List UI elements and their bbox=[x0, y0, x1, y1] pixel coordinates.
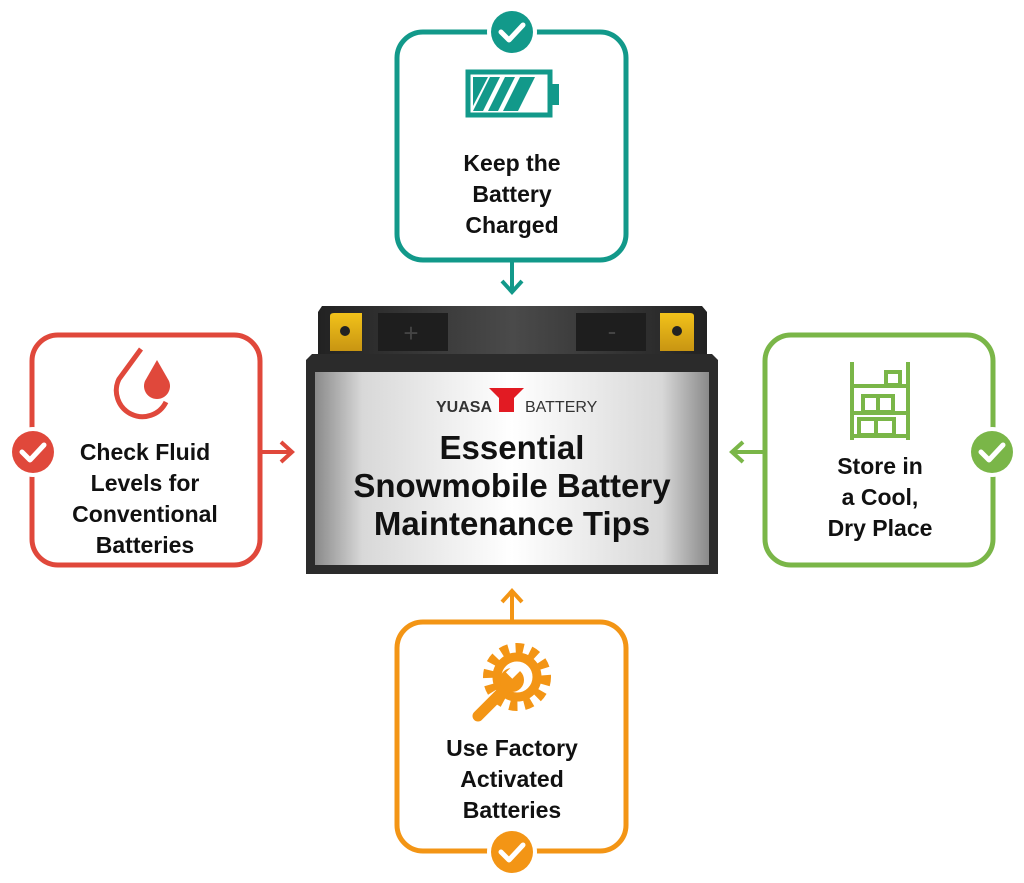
text: check fluid: Conventional bbox=[72, 501, 218, 527]
text: factory: Batteries bbox=[463, 797, 561, 823]
title: Essential bbox=[440, 429, 584, 466]
panel: store cool dry bbox=[732, 335, 1017, 565]
arrow up bbox=[502, 591, 522, 620]
text: keep charged: Keep the bbox=[463, 150, 561, 176]
icon: shelves bbox=[852, 362, 908, 440]
icon: check green bbox=[967, 427, 1017, 477]
battery illustration: - bbox=[608, 316, 616, 346]
panel: keep charged bbox=[397, 7, 626, 292]
icon: battery charged bbox=[468, 72, 559, 115]
logo: yuasa: YUASA bbox=[436, 399, 492, 416]
title: Snowmobile Battery bbox=[353, 467, 671, 504]
icon: check red bbox=[8, 427, 58, 477]
logo: yuasa: BATTERY bbox=[525, 399, 598, 416]
title: Maintenance Tips bbox=[374, 505, 650, 542]
arrow left bbox=[732, 442, 763, 462]
logo: yuasa bbox=[436, 388, 598, 416]
text: store: Dry Place bbox=[828, 515, 932, 541]
text: factory: Use Factory bbox=[446, 735, 578, 761]
battery illustration bbox=[306, 306, 718, 574]
icon: fluid drops bbox=[116, 349, 170, 417]
panel: factory activated bbox=[397, 591, 626, 877]
text: keep charged: Charged bbox=[465, 212, 559, 238]
text: check fluid: Levels for bbox=[91, 470, 199, 496]
arrow down bbox=[502, 262, 522, 292]
text: check fluid: Check Fluid bbox=[80, 439, 210, 465]
battery illustration: + bbox=[403, 318, 419, 348]
arrow right bbox=[262, 442, 292, 462]
icon: gear wrench bbox=[478, 648, 546, 716]
text: keep charged: Battery bbox=[472, 181, 552, 207]
text: factory: Activated bbox=[460, 766, 564, 792]
text: store: Store in bbox=[837, 453, 923, 479]
terminals bbox=[330, 313, 694, 351]
text: check fluid: Batteries bbox=[96, 532, 194, 558]
text: store: a Cool, bbox=[842, 484, 918, 510]
panel: check fluid bbox=[8, 335, 292, 565]
icon: check teal bbox=[487, 7, 537, 57]
icon: check orange bbox=[487, 827, 537, 877]
